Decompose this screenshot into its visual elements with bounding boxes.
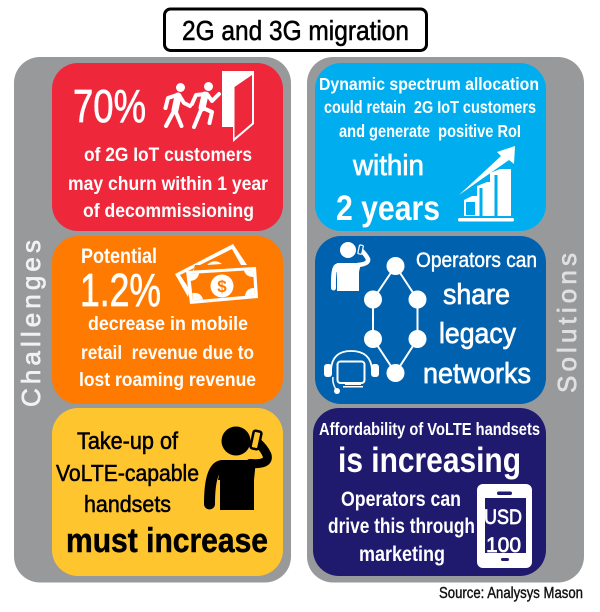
card: affordability of handsets: drive this through xyxy=(328,515,475,538)
card: share legacy networks xyxy=(315,236,546,404)
card: dynamic spectrum xyxy=(315,63,546,231)
panel: challenges xyxy=(14,57,291,582)
card: VoLTE take-up: VoLTE-capable xyxy=(56,460,199,486)
card: dynamic spectrum: could retain 2G IoT customers xyxy=(324,97,536,117)
card: 1.2% revenue xyxy=(52,236,283,404)
card: 70% churn xyxy=(52,63,283,231)
card: affordability of handsets: Affordability of VoLTE handsets xyxy=(319,419,540,439)
icon: person on phone xyxy=(210,426,267,510)
card: share legacy networks: share xyxy=(443,279,510,311)
card: 1.2% revenue: Potential xyxy=(81,244,157,268)
card: 70% churn: of decommissioning xyxy=(83,200,254,222)
card: VoLTE take-up: must increase xyxy=(66,522,268,560)
label: challenges: Challenges xyxy=(16,240,46,407)
label: solutions: Solutions xyxy=(552,253,582,393)
title xyxy=(164,9,426,50)
icon: smartphone with price: USD xyxy=(484,505,522,529)
card: 70% churn: 70% xyxy=(73,80,146,132)
card: share legacy networks: Operators can xyxy=(416,248,537,272)
icon: open door xyxy=(222,71,254,142)
icon: growth chart xyxy=(458,146,515,222)
card: 70% churn: may churn within 1 year xyxy=(68,173,268,195)
card: share legacy networks: networks xyxy=(423,358,531,390)
card: 1.2% revenue: lost roaming revenue xyxy=(79,369,256,391)
icon: banknotes: $ xyxy=(217,277,227,296)
card: VoLTE take-up xyxy=(52,408,283,576)
icon: smartphone with price: 100 xyxy=(486,533,521,557)
card: dynamic spectrum: Dynamic spectrum allocation xyxy=(319,74,539,94)
title: 2G and 3G migration xyxy=(182,15,409,46)
card: 1.2% revenue: retail revenue due to xyxy=(81,342,254,364)
card: dynamic spectrum: within xyxy=(352,150,424,182)
card: affordability of handsets: is increasing xyxy=(338,441,521,480)
panel: solutions xyxy=(307,57,584,582)
icon: network diagram xyxy=(364,257,426,382)
card: affordability of handsets xyxy=(313,408,546,576)
card: dynamic spectrum: 2 years xyxy=(336,189,440,228)
card: 70% churn: of 2G IoT customers xyxy=(84,144,252,166)
card: share legacy networks: legacy xyxy=(439,318,516,350)
card: 1.2% revenue: 1.2% xyxy=(80,264,161,316)
card: dynamic spectrum: and generate positive RoI xyxy=(339,121,521,141)
icon: small caller xyxy=(333,242,368,291)
icon: headset and monitor xyxy=(324,351,379,394)
icon: smartphone with price xyxy=(477,484,532,568)
card: affordability of handsets: Operators can xyxy=(341,488,461,511)
card: VoLTE take-up: Take-up of xyxy=(77,428,178,455)
icon: banknotes xyxy=(175,244,258,304)
card: VoLTE take-up: handsets xyxy=(84,491,171,517)
card: affordability of handsets: marketing xyxy=(359,543,445,566)
icon: walking and running people xyxy=(166,82,219,127)
card: 1.2% revenue: decrease in mobile xyxy=(88,313,248,335)
